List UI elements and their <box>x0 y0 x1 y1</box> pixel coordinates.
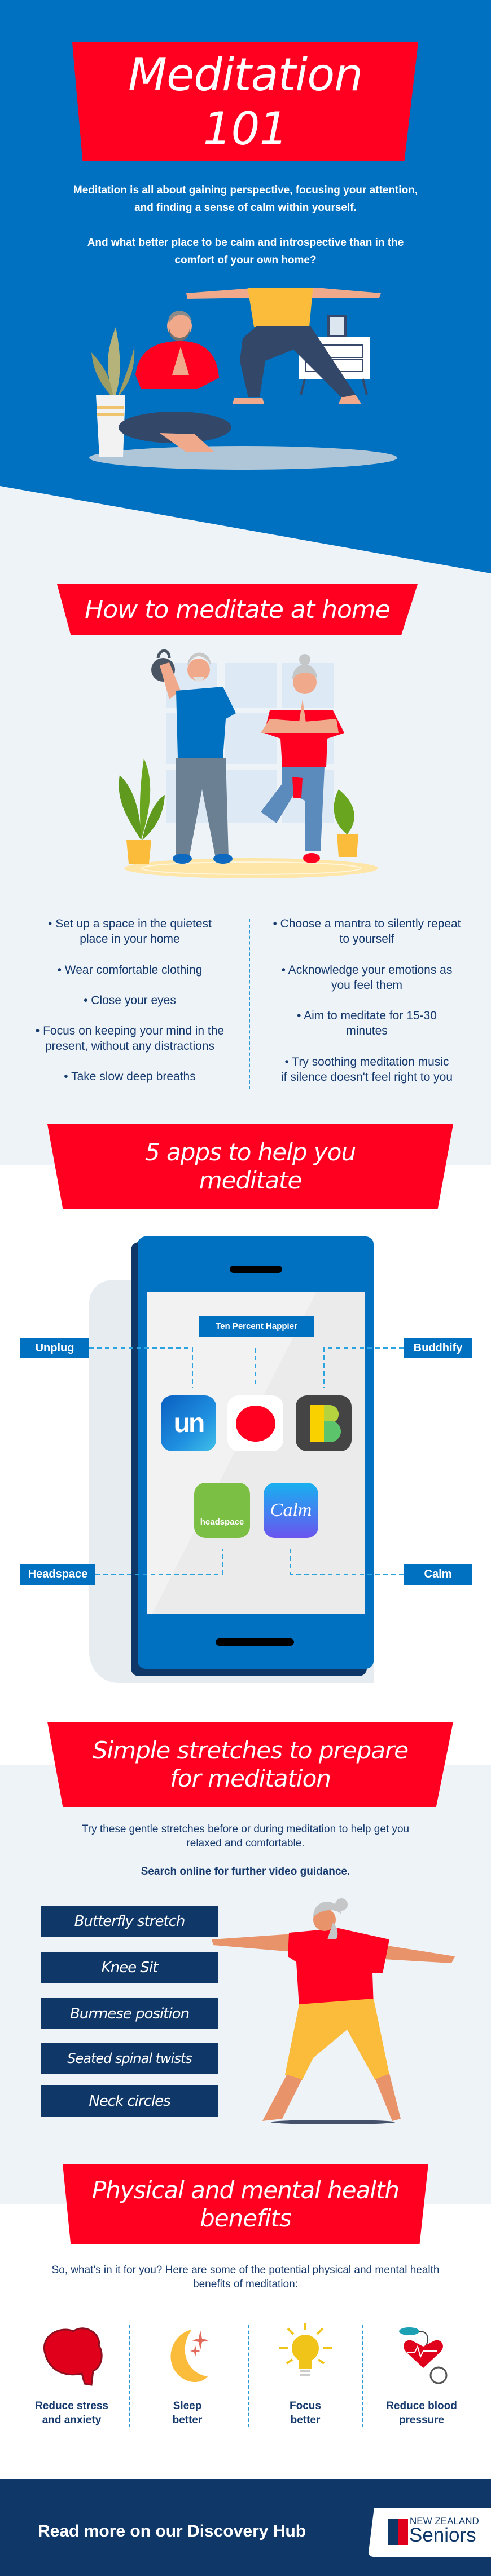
heading: benefits <box>63 2164 428 2244</box>
tips: left column: • Set up a space in the quietest <box>48 917 212 930</box>
label: Headspace <box>20 1564 95 1585</box>
benefit labels <box>35 2400 457 2426</box>
stretch list: Neck circles <box>89 2093 170 2110</box>
tips: left column: • Wear comfortable clothing <box>58 964 202 977</box>
icon: blood pressure <box>399 2327 446 2383</box>
illustration: exercising couple <box>119 649 378 878</box>
label: Headspace: Headspace <box>28 1568 87 1580</box>
intro text: Meditation is all about gaining perspective, focusing your attention, <box>73 184 418 196</box>
illustration: stretching woman <box>212 1898 455 2124</box>
title banner: 101 <box>203 103 287 154</box>
heading: how to meditate at home: How to meditate at home <box>85 595 390 624</box>
heading: simple stretches <box>47 1722 453 1807</box>
title banner <box>72 42 418 161</box>
tips: right column <box>273 917 461 1084</box>
tips: right column: if silence doesn't feel right to you <box>281 1071 453 1084</box>
heading: simple stretches: Simple stretches to prepare <box>93 1737 408 1764</box>
tips: right column: to yourself <box>340 933 394 945</box>
benefit labels: better <box>173 2414 202 2426</box>
intro text: and finding a sense of calm within yourself. <box>134 202 357 214</box>
heading: 5 apps <box>47 1124 453 1209</box>
label: Unplug <box>20 1338 89 1358</box>
label: Buddhify: Buddhify <box>414 1342 462 1354</box>
tips: left column: present, without any distractions <box>45 1040 214 1053</box>
intro text: comfort of your own home? <box>174 254 317 266</box>
stretches intro text: relaxed and comfortable. <box>186 1837 305 1849</box>
benefit labels: Reduce stress <box>35 2400 108 2412</box>
heading: simple stretches: for meditation <box>170 1765 331 1792</box>
benefit labels: Focus <box>290 2400 321 2412</box>
heading: 5 apps: meditate <box>199 1167 301 1194</box>
icon: calm: Calm <box>270 1500 312 1521</box>
phone with apps <box>20 1236 472 1683</box>
benefit labels: pressure <box>399 2414 444 2426</box>
stretch list: Butterfly stretch <box>74 1912 185 1929</box>
man <box>151 658 175 682</box>
label: Unplug: Unplug <box>36 1342 74 1354</box>
tips: right column: you feel them <box>331 979 402 992</box>
icon: brain <box>44 2328 102 2385</box>
label: Calm <box>404 1564 472 1585</box>
intro text <box>73 184 418 266</box>
stretches intro text <box>82 1823 409 1877</box>
footer <box>0 2479 491 2576</box>
tips: right column: • Choose a mantra to silently repeat <box>273 917 461 930</box>
logo <box>368 2508 491 2557</box>
heading: how to meditate at home <box>57 584 418 635</box>
label: Ten Percent Happier: Ten Percent Happier <box>216 1322 297 1331</box>
tips: right column: • Try soothing meditation music <box>284 1055 449 1068</box>
icon: buddhify <box>296 1395 352 1451</box>
standing woman <box>186 288 381 299</box>
label: Buddhify <box>404 1338 472 1358</box>
plants <box>119 775 141 840</box>
tips: left column: • Close your eyes <box>84 994 176 1007</box>
intro text: And what better place to be calm and introspective than in the <box>87 237 404 249</box>
title banner: Meditation <box>128 48 362 100</box>
sitting man <box>119 412 231 443</box>
heading: benefits: benefits <box>200 2204 291 2232</box>
woman <box>264 710 344 767</box>
label: Ten Percent Happier <box>199 1316 314 1337</box>
stretch list <box>41 1906 218 2117</box>
icon: unplug: un <box>174 1408 203 1438</box>
tips: left column <box>36 917 224 1083</box>
dresser <box>327 315 347 337</box>
icon: moon <box>170 2330 209 2382</box>
icon: unplug <box>161 1395 216 1451</box>
tips: right column: • Acknowledge your emotions as <box>282 964 452 977</box>
icon: calm <box>264 1483 318 1538</box>
icon: headspace: headspace <box>200 1517 244 1527</box>
icon: headspace <box>194 1483 250 1538</box>
divider <box>249 919 250 1089</box>
tips: right column: minutes <box>346 1024 388 1037</box>
benefits intro text: benefits of meditation: <box>193 2278 298 2290</box>
benefits icons <box>43 2323 447 2386</box>
stretches intro text: Search online for further video guidance. <box>141 1866 350 1877</box>
stretch list: Knee Sit <box>102 1959 157 1976</box>
icon: ten percent happier <box>227 1395 283 1451</box>
plant <box>91 327 134 457</box>
logo: Seniors <box>409 2524 476 2546</box>
footer text: Read more on our Discovery Hub <box>38 2522 306 2540</box>
benefits intro text: So, what's in it for you? Here are some of the potential physical and mental health <box>52 2264 439 2276</box>
heading: 5 apps: 5 apps to help you <box>145 1138 356 1166</box>
stretches intro text: Try these gentle stretches before or during meditation to help get you <box>82 1823 409 1835</box>
tips: right column: • Aim to meditate for 15-30 <box>297 1009 437 1022</box>
heading: benefits: Physical and mental health <box>92 2176 399 2203</box>
label: Calm: Calm <box>424 1568 451 1580</box>
stretch list: Burmese position <box>70 2005 189 2022</box>
tips: left column: • Focus on keeping your mind in the <box>36 1024 224 1037</box>
benefit labels: and anxiety <box>42 2414 101 2426</box>
benefit labels: Sleep <box>173 2400 201 2412</box>
benefits intro text <box>52 2264 439 2290</box>
stretch list: Seated spinal twists <box>67 2050 192 2066</box>
tips: left column: place in your home <box>80 933 180 945</box>
benefit labels: Reduce blood <box>386 2400 457 2412</box>
tips: left column: • Take slow deep breaths <box>64 1070 196 1083</box>
illustration: couple meditating at home <box>89 288 397 470</box>
benefit dividers <box>129 2325 130 2427</box>
benefit labels: better <box>291 2414 320 2426</box>
icon: bulb <box>279 2323 332 2376</box>
logo: NEW ZEALAND <box>410 2516 479 2526</box>
